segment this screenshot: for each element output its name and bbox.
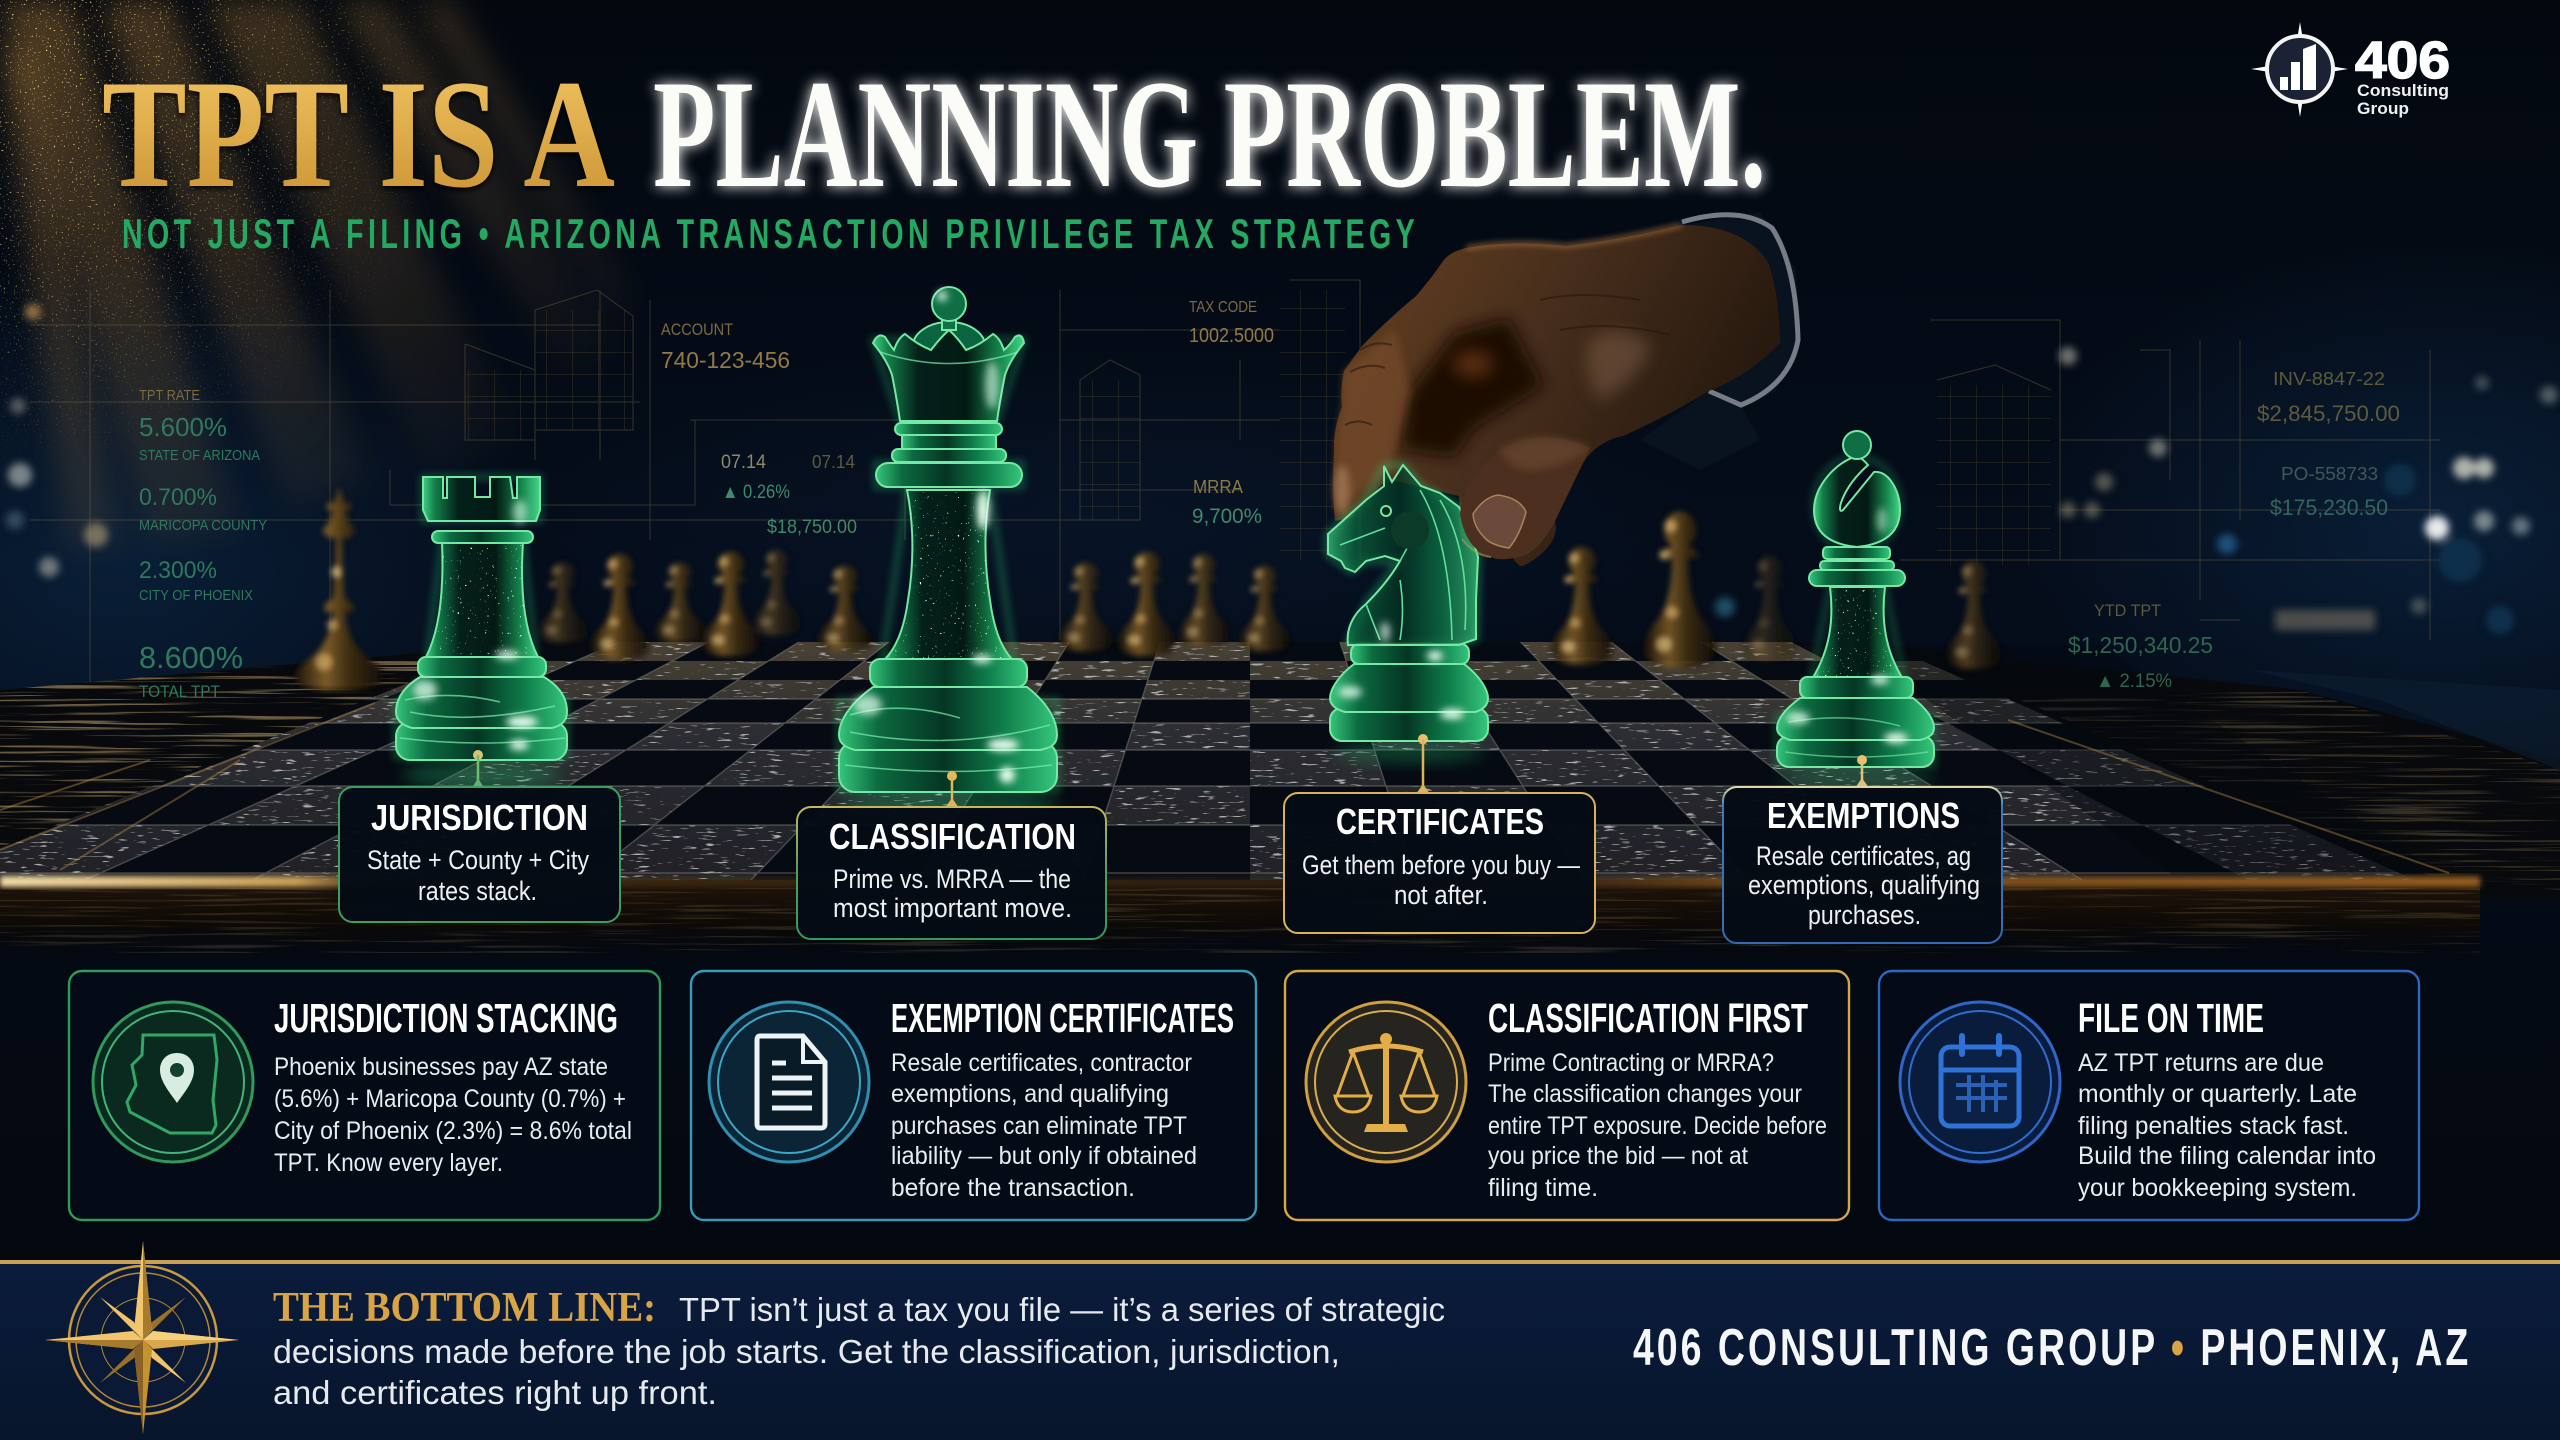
background data: account [661,299,1274,538]
title: PLANNING PROBLEM. [653,48,1766,220]
panel: exemption certificates: before the transaction. [891,1174,1135,1202]
callout: jurisdiction: State + County + City [367,845,589,875]
background data: account: TAX CODE [1189,299,1257,316]
callout: classification [797,771,1106,939]
icon: calendar [1900,1002,2060,1162]
background gold chess pieces [295,487,2000,690]
background data: left rates: 5.600% [139,412,227,442]
callout: exemptions: EXEMPTIONS [1767,795,1960,836]
panel: jurisdiction stacking [69,971,660,1220]
panel: file on time [1879,971,2419,1220]
panel: file on time: filing penalties stack fast. [2078,1112,2349,1140]
panel: classification first: filing time. [1488,1174,1598,1202]
background data: account: 1002.5000 [1189,325,1274,347]
callout: jurisdiction [339,750,620,922]
footer band: decisions made before the job starts. Get the classification, jurisdiction, [273,1333,1340,1370]
callout: jurisdiction: JURISDICTION [371,797,588,838]
panel: jurisdiction stacking: City of Phoenix (2.3%) = 8.6% total [274,1117,632,1145]
panel: file on time: your bookkeeping system. [2078,1174,2357,1202]
panel: classification first [1285,971,1849,1220]
title: TPT IS A [102,48,615,220]
panel: file on time: AZ TPT returns are due [2078,1049,2324,1077]
wireframe skyline and grid [30,280,2440,720]
panel: jurisdiction stacking: JURISDICTION STACKING [274,995,618,1041]
background data: left rates: CITY OF PHOENIX [139,587,253,604]
callout: certificates: not after. [1394,880,1488,910]
hand behind the knight [1333,212,1800,566]
background data: account: ACCOUNT [661,320,733,339]
background data: account: 07.14 [721,452,766,473]
panel: classification first: The classification changes your [1488,1080,1802,1108]
panel: classification first: you price the bid — not at [1488,1142,1748,1170]
background data: invoices: ▲ 2.15% [2096,671,2172,692]
panel: file on time: FILE ON TIME [2078,995,2264,1041]
thumb [1460,437,1590,559]
icon: scales [1306,1002,1466,1162]
footer band [0,1241,2560,1440]
bishop piece [1777,431,1935,788]
logo [2251,22,2450,118]
callout: exemptions [1723,755,2002,943]
callout: certificates: CERTIFICATES [1336,801,1544,842]
callout: exemptions: Resale certificates, ag [1756,841,1971,871]
panel: exemption certificates: exemptions, and qualifying [891,1080,1169,1108]
callout: classification: Prime vs. MRRA — the [833,864,1071,894]
background data: left rates: STATE OF ARIZONA [139,447,260,464]
background data: left rates: MARICOPA COUNTY [139,517,267,534]
footer band: TPT isn’t just a tax you file — it’s a series of strategic [679,1291,1445,1328]
background data: left rates: TPT RATE [139,387,200,404]
chess board [0,642,2560,953]
panel: exemption certificates [691,971,1256,1220]
icon: compass [45,1241,239,1434]
callout: certificates [1284,734,1595,933]
icon: arizona map pin [93,1002,253,1162]
panel: jurisdiction stacking: Phoenix businesses pay AZ state [274,1053,608,1081]
footer band: 406 CONSULTING GROUP • PHOENIX, AZ [1633,1318,2468,1376]
panel: classification first: entire TPT exposure. Decide before [1488,1112,1827,1140]
callout: classification: most important move. [833,893,1072,923]
background data: invoices [2068,369,2400,692]
background data: invoices: $2,845,750.00 [2257,401,2400,426]
callout: certificates: Get them before you buy — [1302,850,1580,880]
panel: classification first: CLASSIFICATION FIRST [1488,995,1808,1041]
logo: 406 [2355,32,2450,90]
background data: account: MRRA [1193,477,1243,497]
background data: account: 740-123-456 [661,347,790,373]
panel: file on time: monthly or quarterly. Late [2078,1080,2357,1108]
background data: invoices: INV-8847-22 [2273,369,2385,389]
subtitle: NOT JUST A FILING • ARIZONA TRANSACTION PRIVILEGE TAX STRATEGY [122,209,1415,257]
background data: account: 9,700% [1192,505,1262,528]
panel: jurisdiction stacking: (5.6%) + Maricopa County (0.7%) + [274,1085,626,1113]
light rays [0,0,640,560]
knight piece [1328,465,1488,762]
panel: exemption certificates: EXEMPTION CERTIFICATES [891,995,1234,1041]
background data: left rates: 8.600% [139,640,243,675]
background data: invoices: PO-558733 [2281,464,2378,484]
callout: jurisdiction: rates stack. [418,876,537,906]
panel: file on time: Build the filing calendar into [2078,1142,2376,1170]
callout: exemptions: purchases. [1808,900,1921,930]
panel: jurisdiction stacking: TPT. Know every layer. [274,1149,503,1177]
panel: exemption certificates: Resale certificates, contractor [891,1049,1192,1077]
rook piece [396,477,567,789]
background data: invoices: YTD TPT [2094,601,2161,620]
icon: document [709,1002,869,1162]
footer band: THE BOTTOM LINE: [273,1285,656,1331]
footer band: and certificates right up front. [273,1374,717,1411]
background data: left rates [139,387,267,701]
bokeh lights [6,304,2558,634]
title [102,48,1766,220]
background data: account: ▲ 0.26% [722,482,790,503]
logo: Group [2357,99,2409,118]
background data: left rates: TOTAL TPT [139,682,220,701]
callout: exemptions: exemptions, qualifying [1748,870,1980,900]
logo: Consulting [2357,81,2449,100]
background data: invoices: $175,230.50 [2270,495,2388,520]
panel: classification first: Prime Contracting or MRRA? [1488,1049,1774,1077]
background data: account: 07.14 [812,452,855,472]
callout: classification: CLASSIFICATION [829,816,1076,857]
panel: exemption certificates: liability — but only if obtained [891,1142,1197,1170]
background data: account: $18,750.00 [767,517,857,538]
background data: left rates: 0.700% [139,484,217,511]
queen piece [839,287,1059,819]
panel: exemption certificates: purchases can eliminate TPT [891,1112,1187,1140]
background data: invoices: $1,250,340.25 [2068,632,2213,658]
background data: left rates: 2.300% [139,557,217,584]
